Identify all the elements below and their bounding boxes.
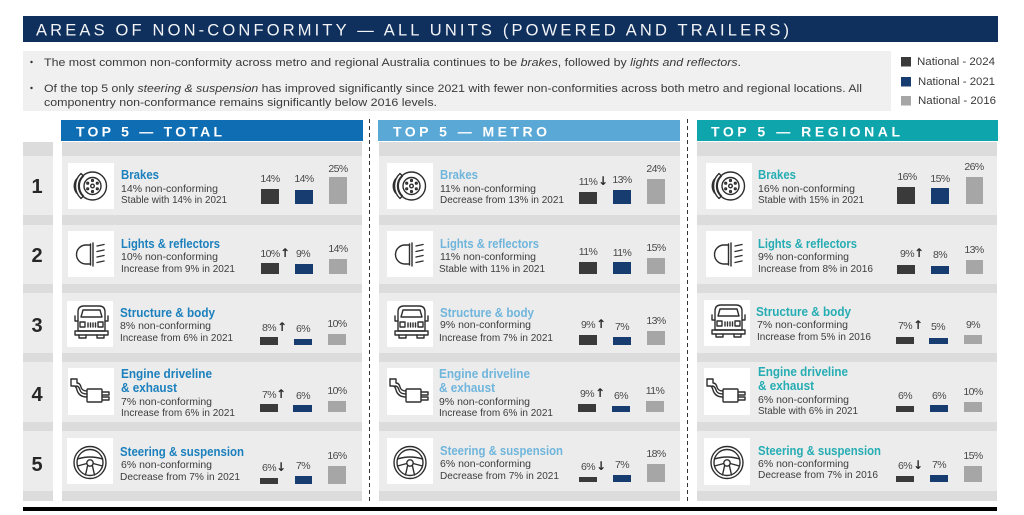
- row: structure regional: 7% non-conforming: [757, 319, 848, 331]
- row: lights metro: [379, 225, 680, 284]
- row: engine metro: 11%: [646, 385, 664, 397]
- row: lights total: 14%: [328, 243, 348, 255]
- row: structure regional: 7%: [898, 320, 912, 332]
- row: brakes metro: ↓: [598, 174, 608, 188]
- row: lights metro: 11%: [579, 246, 597, 258]
- row: structure metro: ↑: [596, 317, 606, 331]
- row: engine metro: 9%: [580, 388, 594, 400]
- row: brakes regional: Brakes: [758, 168, 796, 182]
- row: structure regional: Structure & body: [756, 305, 851, 319]
- legend: National - 2021: [918, 76, 995, 88]
- panel: top 5 regional: [697, 120, 998, 501]
- row: lights metro: Lights & reflectors: [440, 237, 539, 251]
- rank column: [23, 142, 53, 501]
- row: brakes total: 14%: [294, 173, 314, 185]
- legend: [901, 56, 996, 107]
- header: total: [61, 120, 363, 141]
- row: engine total: [62, 362, 362, 422]
- panel: top 5 total: [61, 120, 363, 501]
- row: lights total: 10% non-conforming: [121, 251, 218, 263]
- row: engine metro: 6%: [614, 390, 628, 402]
- row: steering regional: 7%: [932, 459, 946, 471]
- rank column: 4: [31, 384, 43, 406]
- row: brakes regional: 15%: [930, 173, 950, 185]
- row: structure regional: Increase from 5% in 2016: [757, 331, 871, 343]
- row: lights regional: 13%: [964, 244, 984, 256]
- header: total: TOP 5 — TOTAL: [76, 124, 222, 140]
- row: structure regional: 9%: [966, 319, 980, 331]
- row: steering regional: Steering & suspension: [758, 444, 881, 458]
- row: lights total: Lights & reflectors: [121, 237, 220, 251]
- row: brakes regional: 16%: [897, 171, 917, 183]
- row: engine total: ↑: [276, 387, 286, 401]
- row: structure metro: 9% non-conforming: [440, 319, 531, 331]
- row: brakes total: 25%: [328, 163, 348, 175]
- row: engine total: Increase from 6% in 2021: [121, 407, 235, 419]
- row: steering regional: Decrease from 7% in 2016: [758, 469, 878, 481]
- row: structure total: Increase from 6% in 2021: [120, 332, 233, 344]
- row: engine total: 6%: [296, 390, 310, 402]
- row: lights total: Increase from 9% in 2021: [121, 263, 235, 275]
- row: engine regional: 6%: [932, 390, 946, 402]
- panel: key findings: Of the top 5 only steering & suspension has improved significantly since 2021 with fewer non-conformities across both metro and regional locations. All: [44, 83, 862, 95]
- row: lights regional: 9%: [900, 248, 914, 260]
- rank column: 3: [31, 315, 43, 337]
- row: steering regional: [697, 431, 997, 491]
- row: brakes regional: 16% non-conforming: [758, 183, 855, 195]
- row: lights regional: [697, 225, 997, 284]
- row: engine regional: 6%: [898, 390, 912, 402]
- legend: National - 2016: [918, 95, 996, 107]
- legend: National - 2024: [917, 56, 995, 68]
- panel: key findings: componentry non-conformance remains significantly below 2016 levels.: [44, 97, 437, 109]
- row: steering total: ↓: [276, 460, 286, 474]
- row: structure regional: [697, 293, 997, 353]
- row: lights total: 10%: [260, 248, 280, 260]
- rank column: 1: [31, 176, 43, 198]
- row: steering metro: 6% non-conforming: [440, 458, 531, 470]
- title banner: AREAS OF NON-CONFORMITY — ALL UNITS (POWERED AND TRAILERS): [36, 22, 789, 40]
- row: brakes total: Stable with 14% in 2021: [121, 194, 227, 206]
- row: structure metro: Structure & body: [440, 306, 534, 320]
- row: steering total: Steering & suspension: [120, 445, 244, 459]
- row: brakes total: Brakes: [121, 168, 159, 182]
- row: brakes metro: [379, 156, 680, 215]
- row: structure total: [62, 293, 362, 353]
- header: metro: TOP 5 — METRO: [393, 124, 547, 140]
- row: engine regional: Stable with 6% in 2021: [758, 405, 858, 417]
- row: engine regional: 6% non-conforming: [758, 394, 849, 406]
- panel: top 5 metro: [378, 120, 680, 501]
- row: structure regional: ↑: [913, 318, 923, 332]
- rank column: 5: [31, 454, 43, 476]
- row: brakes total: 14%: [260, 173, 280, 185]
- row: lights metro: Stable with 11% in 2021: [439, 263, 545, 275]
- row: engine total: 10%: [327, 385, 347, 397]
- row: engine total: Engine driveline: [121, 367, 212, 381]
- row: engine metro: Increase from 6% in 2021: [439, 407, 553, 419]
- row: steering regional: ↓: [913, 458, 923, 472]
- row: engine regional: 10%: [963, 386, 983, 398]
- row: structure metro: 9%: [581, 319, 595, 331]
- row: brakes metro: Brakes: [440, 168, 478, 182]
- row: steering total: 6%: [262, 462, 276, 474]
- rank column: 2: [31, 245, 43, 267]
- row: lights total: ↑: [280, 246, 290, 260]
- row: engine regional: Engine driveline: [758, 365, 848, 379]
- row: steering total: Decrease from 7% in 2021: [120, 471, 240, 483]
- row: brakes total: 14% non-conforming: [121, 183, 218, 195]
- row: steering metro: 6%: [581, 461, 595, 473]
- row: structure regional: 5%: [931, 321, 945, 333]
- row: engine metro: [379, 362, 680, 422]
- row: lights regional: 9% non-conforming: [758, 251, 849, 263]
- row: steering total: 7%: [296, 460, 310, 472]
- row: brakes total: [62, 156, 362, 215]
- header: metro: [378, 120, 680, 141]
- row: structure metro: Increase from 7% in 2021: [439, 332, 553, 344]
- row: lights metro: 11%: [613, 247, 631, 259]
- row: lights regional: Increase from 8% in 2016: [758, 263, 873, 275]
- row: lights total: [62, 225, 362, 284]
- row: brakes metro: 11% non-conforming: [440, 183, 536, 195]
- row: brakes metro: Decrease from 13% in 2021: [440, 194, 564, 206]
- panel: key findings: [23, 51, 891, 111]
- panel: key findings: The most common non-conformity across metro and regional Australia continues to be brakes , followed by lights and reflectors .: [44, 57, 741, 69]
- row: steering total: 6% non-conforming: [121, 459, 212, 471]
- row: steering regional: 15%: [963, 450, 983, 462]
- header: regional: TOP 5 — REGIONAL: [711, 124, 900, 140]
- row: lights total: 9%: [296, 248, 310, 260]
- row: steering total: [62, 431, 362, 491]
- row: structure metro: 7%: [615, 321, 629, 333]
- row: engine total: & exhaust: [121, 381, 178, 395]
- row: steering regional: 6%: [898, 460, 912, 472]
- row: structure metro: [379, 293, 680, 353]
- row: steering regional: 6% non-conforming: [758, 458, 849, 470]
- row: structure total: 10%: [327, 318, 347, 330]
- row: brakes regional: [697, 156, 997, 215]
- row: steering metro: [379, 431, 680, 491]
- row: brakes metro: 11%: [579, 176, 597, 188]
- row: engine metro: Engine driveline: [439, 367, 530, 381]
- row: engine total: 7%: [262, 389, 276, 401]
- row: steering total: 16%: [327, 450, 347, 462]
- row: lights metro: 11% non-conforming: [440, 251, 536, 263]
- row: structure total: Structure & body: [120, 306, 215, 320]
- header: regional: [697, 120, 998, 141]
- row: lights regional: Lights & reflectors: [758, 237, 857, 251]
- title banner: [23, 16, 998, 42]
- row: steering metro: 18%: [646, 448, 666, 460]
- row: structure total: ↑: [277, 320, 287, 334]
- row: brakes metro: 13%: [612, 174, 632, 186]
- row: engine metro: 9% non-conforming: [439, 396, 530, 408]
- row: steering metro: Steering & suspension: [440, 444, 563, 458]
- row: brakes metro: 24%: [646, 163, 666, 175]
- row: lights regional: 8%: [933, 249, 947, 261]
- row: engine total: 7% non-conforming: [121, 396, 212, 408]
- row: lights regional: ↑: [914, 246, 924, 260]
- row: structure metro: 13%: [646, 315, 666, 327]
- row: steering metro: ↓: [596, 459, 606, 473]
- row: structure total: 8%: [262, 322, 276, 334]
- row: structure total: 8% non-conforming: [120, 320, 211, 332]
- row: steering metro: 7%: [615, 459, 629, 471]
- row: brakes regional: Stable with 15% in 2021: [758, 194, 864, 206]
- row: structure total: 6%: [296, 323, 310, 335]
- row: lights metro: 15%: [646, 242, 666, 254]
- row: brakes regional: 26%: [964, 161, 984, 173]
- row: engine regional: & exhaust: [758, 379, 815, 393]
- row: engine metro: ↑: [595, 386, 605, 400]
- row: engine regional: [697, 362, 997, 422]
- row: engine metro: & exhaust: [439, 381, 496, 395]
- row: steering metro: Decrease from 7% in 2021: [440, 470, 559, 482]
